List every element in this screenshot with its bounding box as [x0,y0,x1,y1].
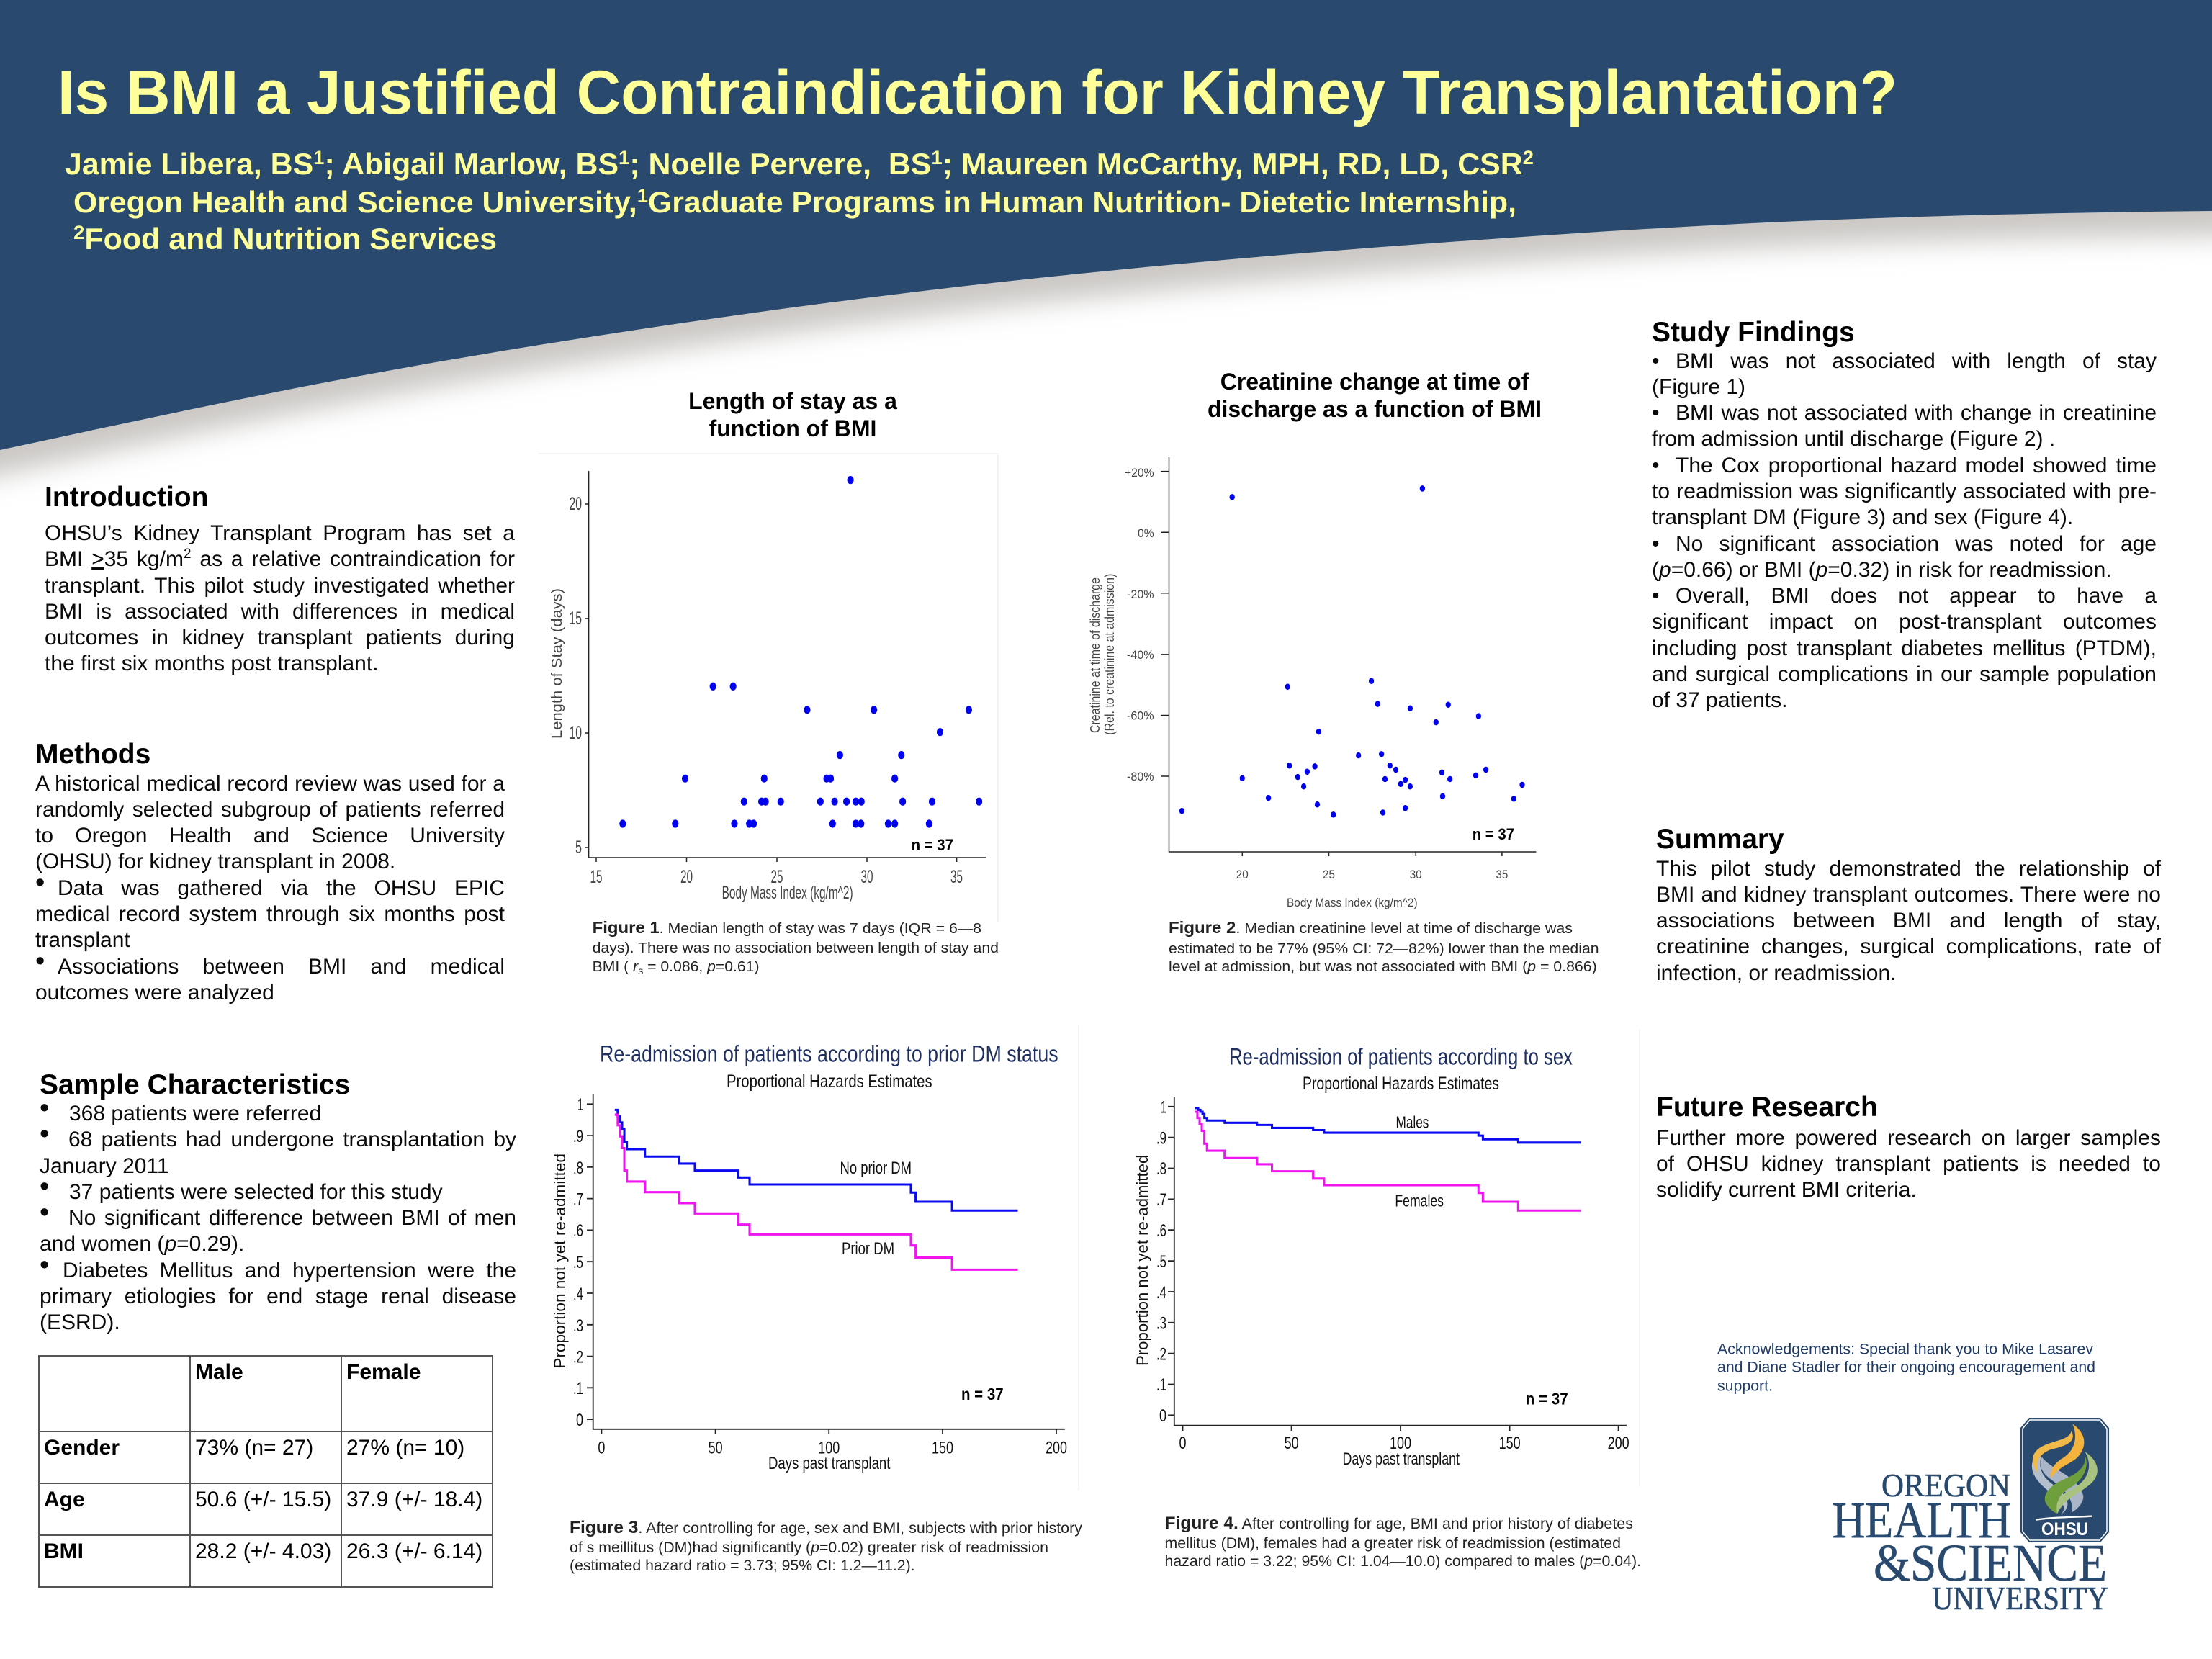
axis labels: figure 1: Length of Stay (days) [549,588,565,739]
axis labels: figure 2: 35 [1496,868,1508,881]
axes: figure 3 [587,1094,1065,1434]
text: introduction body: OHSU’s Kidney Transplant Program has set a [45,521,515,545]
axis labels: figure 1: Body Mass Index (kg/m^2) [722,883,853,903]
axis labels: figure 4 [1133,1097,1629,1469]
authors and affiliations: 2 [73,222,84,243]
caption: figure 1: s [638,965,643,976]
text: methods body: medical record system through six months post [35,902,505,926]
table: sample characteristics by sex: Male [195,1360,243,1384]
authors and affiliations: 1 [619,147,629,168]
text: sample characteristics list: primary etiologies for end stage renal disease [40,1285,516,1308]
text: methods body: outcomes were analyzed [35,981,274,1004]
text: methods body: • [35,946,45,976]
text: sample characteristics list: • [40,1093,49,1123]
table: sample characteristics by sex: BMI [44,1539,84,1563]
heading: summary: Summary [1656,824,1784,854]
curve labels: figure 3: Prior DM [842,1239,894,1259]
logo wordmark: UNIVERSITY [1932,1580,2108,1617]
survival curves: figure 3 [615,1110,1017,1269]
authors and affiliations: 1 [637,185,648,207]
caption: figure 4: Figure 4. After controlling for age, BMI and prior history of diabetes [1165,1514,1633,1533]
text: methods body: Associations between BMI and medical [58,955,505,979]
text: study findings list: (p=0.66) or BMI (p=0.32) in risk for readmission. [1652,558,2112,582]
text: study findings list: No significant association was noted for age [1676,532,2157,556]
curve labels: figure 4 [1395,1112,1444,1210]
authors and affiliations: Oregon Health and Science University, [73,185,627,219]
axis labels: figure 2: Body Mass Index (kg/m^2) [1287,896,1418,909]
panel: summary [1656,824,2161,985]
table: sample characteristics by sex: Gender [44,1436,120,1460]
axis labels: figure 1: 35 [950,867,963,887]
data points: figure 2 [1182,488,1522,814]
text: sample characteristics list: 368 patients were referred [69,1102,321,1125]
icon: OHSU badge: OHSU [2041,1519,2088,1539]
heading: figure 1 title: function of BMI [709,415,876,441]
axis labels: figure 2: -20% [1127,588,1154,601]
panel: introduction [45,482,515,675]
text: future research body: Further more powered research on larger samples [1656,1126,2161,1149]
sample size: figure 4: n = 37 [1526,1390,1568,1408]
sample size: figure 2: n = 37 [1473,825,1514,843]
axis labels: figure 3: 0 [598,1439,605,1457]
caption: figure 2: level at admission, but was not associated with BMI ( p = 0.866) [1169,958,1597,975]
axis labels: figure 1: 25 [770,867,783,887]
table: sample characteristics by sex: Female [346,1360,421,1384]
heading: introduction: Introduction [45,482,208,513]
acknowledgements: support. [1717,1378,1773,1394]
text: study findings list: • [1652,454,1660,477]
text: study findings list: transplant DM (Figure 3) and sex (Figure 4). [1652,505,2073,529]
table: sample characteristics by sex: 27% (n= 10) [346,1436,464,1460]
logo: OHSU [1832,1418,2109,1617]
text: introduction body: the first six months post transplant. [45,652,379,675]
text: methods body [35,772,505,1004]
text: study findings list: significant impact on post-transplant outcomes [1652,610,2157,634]
text: introduction body [45,521,515,675]
authors and affiliations: 1 [313,147,325,168]
axis labels: figure 1: 10 [569,723,582,743]
text: study findings list: from admission until discharge (Figure 2) . [1652,427,2055,451]
sample size: figure 3: n = 37 [961,1385,1004,1403]
axis labels: figure 4: .9 [1156,1129,1166,1148]
icon: OHSU badge [2020,1418,2109,1542]
text: study findings list: • [1652,401,1660,425]
text: future research body: solidify current BMI criteria. [1656,1178,1917,1202]
caption: figure 1: days). There was no association between length of stay and [593,940,999,956]
heading: figure 2 title [1208,369,1542,422]
title: Is BMI a Justified Contraindication for Kidney Transplantation? [58,58,1897,127]
axis labels: figure 4: .7 [1156,1190,1166,1210]
header banner with curved edge [0,0,2212,489]
axis labels: figure 1: 15 [590,867,602,887]
text: future research body: of OHSU kidney transplant patients is needed to [1656,1152,2161,1176]
text: study findings list: The Cox proportional hazard model showed time [1676,454,2157,477]
text: sample characteristics list: 68 patients had undergone transplantation by [68,1128,516,1151]
heading: figure 4 title: Re-admission of patients according to sex [1229,1044,1573,1070]
caption: figure 4: hazard ratio = 3.22; 95% CI: 1.04—10.0) compared to males ( p=0.04). [1165,1553,1641,1570]
text: sample characteristics list: • [40,1119,49,1149]
text: sample characteristics list: No significant difference between BMI of men [68,1206,516,1230]
text: sample characteristics list [40,1093,516,1334]
caption: figure 4 [1165,1514,1641,1570]
text: sample characteristics list: 37 patients were selected for this study [69,1180,443,1204]
text: methods body: to Oregon Health and Science University [35,824,505,848]
axis labels: figure 4: Days past transplant [1342,1449,1460,1469]
axis labels: figure 2: +20% [1125,466,1154,480]
figure 3: re-admission by prior DM status [551,1025,1083,1574]
axis labels: figure 3 [551,1095,1067,1473]
axis labels: figure 4: Proportion not yet re-admitted [1133,1155,1151,1366]
logo wordmark: &SCIENCE [1874,1534,2107,1592]
heading: figure 2 title: discharge as a function of BMI [1208,396,1542,422]
axis labels: figure 4: 200 [1608,1434,1629,1453]
text: summary body: infection, or readmission. [1656,961,1897,985]
panel: future research [1656,1092,2161,1202]
axis labels: figure 2: -60% [1127,709,1154,723]
table: sample characteristics by sex: 73% (n= 27) [195,1436,313,1460]
caption: figure 2: Figure 2. Median creatinine level at time of discharge was [1169,918,1573,937]
table: sample characteristics by sex [38,1355,493,1588]
subtitle: figure 4: Proportional Hazards Estimates [1303,1074,1499,1094]
text: study findings list: Overall, BMI does not appear to have a [1676,584,2157,608]
panel: sample characteristics [40,1069,516,1334]
survival curves: figure 4 [1195,1108,1581,1210]
text: study findings list: • [1652,584,1660,608]
text: study findings list: BMI was not associated with length of stay [1676,349,2157,373]
axis labels: figure 3: .7 [573,1190,583,1210]
panel: methods [35,739,505,1004]
text: summary body: BMI and kidney transplant outcomes. There were no [1656,883,2161,907]
axis labels: figure 4: .2 [1156,1345,1166,1364]
caption: figure 3: of s meillitus (DM)had significantly (p=0.02) greater risk of readmission [570,1539,1048,1556]
axis labels: figure 3: .4 [573,1285,583,1304]
authors and affiliations: Jamie Libera, BS [65,147,308,181]
axes: figure 1 [585,471,986,862]
caption: figure 4: mellitus (DM), females had a greater risk of readmission (estimated [1165,1535,1621,1552]
logo wordmark: HEALTH [1832,1491,2011,1549]
text: study findings list: of 37 patients. [1652,688,1787,712]
subtitle: figure 3: Proportional Hazards Estimates [727,1071,932,1092]
figure 2: creatinine change scatter [1088,369,1599,975]
axis labels: figure 4: .3 [1156,1313,1166,1334]
caption: figure 1: = 0.086, [643,958,707,975]
axis labels: figure 3: 200 [1046,1439,1067,1457]
text: sample characteristics list: (ESRD). [40,1310,120,1334]
sample size: figure 1: n = 37 [912,836,953,854]
authors and affiliations: Graduate Programs in Human Nutrition- Dietetic Internship, [648,185,1516,219]
text: sample characteristics list: and women (p=0.29). [40,1232,244,1256]
text: sample characteristics list: • [40,1172,49,1202]
caption: figure 3 [570,1518,1083,1574]
text: study findings list: • [1652,532,1660,556]
axis labels: figure 4: .4 [1156,1283,1166,1303]
axis labels: figure 3: 0 [576,1411,583,1430]
axis labels: figure 4: 150 [1499,1434,1521,1453]
text: introduction body: transplant. This pilot study investigated whether [45,574,515,598]
table: sample characteristics by sex: 50.6 (+/- 15.5) [195,1488,331,1511]
acknowledgements [1717,1341,2095,1394]
text: introduction body: outcomes in kidney transplant patients during [45,626,515,649]
axis labels: figure 1: 30 [861,867,873,887]
authors and affiliations: 1 [931,147,943,168]
axis labels: figure 3: 100 [818,1439,840,1457]
axis labels: figure 1 [549,494,963,903]
axis labels: figure 2: Creatinine at time of discharge [1088,577,1102,733]
text: methods body: Data was gathered via the OHSU EPIC [58,876,505,900]
axes: figure 4 [1168,1097,1627,1431]
text: methods body: (OHSU) for kidney transplant in 2008. [35,850,395,873]
text: introduction body: BMI is associated with differences in medical [45,600,515,624]
axis labels: figure 1: 20 [569,494,582,514]
text: sample characteristics list: January 2011 [40,1154,169,1178]
heading: methods: Methods [35,739,150,769]
axis labels: figure 2 [1088,466,1508,909]
text: future research body [1656,1126,2161,1202]
axis labels: figure 2: -40% [1127,648,1154,662]
logo wordmark: OREGON [1881,1467,2010,1503]
text: summary body [1656,857,2161,985]
axis labels: figure 3: Proportion not yet re-admitted [551,1154,569,1369]
acknowledgements: Acknowledgements: Special thank you to Mike Lasarev [1717,1341,2094,1358]
caption: figure 1: p=0.61) [707,958,758,975]
axis labels: figure 2: 0% [1138,526,1154,540]
text: study findings list: • [1652,349,1660,373]
axis labels: figure 1: 5 [575,837,582,858]
axis labels: figure 2: 25 [1323,868,1335,881]
axis labels: figure 3: .2 [573,1348,583,1367]
title and authors [58,58,1897,256]
authors and affiliations: ; Noelle Pervere, BS [629,147,931,181]
axis labels: figure 3: Days past transplant [768,1454,891,1473]
text: methods body: transplant [35,928,130,952]
axis labels: figure 3: .1 [573,1379,583,1398]
heading: figure 3 title: Re-admission of patients according to prior DM status [600,1041,1058,1067]
text: introduction body: BMI >35 kg/m2 as a relative contraindication for [45,547,515,571]
acknowledgements: and Diane Stadler for their ongoing encouragement and [1717,1359,2095,1375]
axis labels: figure 4: .6 [1156,1221,1166,1241]
heading: figure 2 title: Creatinine change at time of [1220,369,1529,395]
logo wordmark [1832,1467,2108,1617]
table: sample characteristics by sex: 26.3 (+/- 6.14) [346,1539,482,1563]
heading: study findings: Study Findings [1652,317,1855,347]
axis labels: figure 3: 1 [577,1095,583,1115]
axis labels: figure 1: 20 [680,867,693,887]
axis labels: figure 3: .8 [573,1159,583,1178]
text: methods body: • [35,868,45,898]
axis labels: figure 2: 20 [1236,868,1249,881]
text: summary body: This pilot study demonstrated the relationship of [1656,857,2161,880]
axis labels: figure 4: 0 [1159,1406,1166,1426]
authors and affiliations: 2 [1523,147,1534,168]
caption: figure 1: Figure 1. Median length of stay was 7 days (IQR = 6—8 [593,918,981,937]
axis labels: figure 2: (Rel. to creatinine at admission) [1102,574,1117,735]
figure 4: re-admission by sex [1133,1030,1641,1570]
axis labels: figure 3: .9 [573,1127,583,1146]
axis labels: figure 3: .3 [573,1316,583,1336]
caption: figure 2 [1169,918,1599,975]
axis labels: figure 4: .5 [1156,1252,1166,1272]
caption: figure 2: estimated to be 77% (95% CI: 72—82%) lower than the median [1169,940,1599,957]
authors and affiliations: Food and Nutrition Services [84,222,497,256]
curve labels: figure 3 [840,1159,912,1259]
axis labels: figure 4: 50 [1285,1434,1299,1453]
curve labels: figure 3: No prior DM [840,1159,912,1178]
text: sample characteristics list: • [40,1197,49,1228]
caption: figure 1 [593,918,999,976]
heading: future research: Future Research [1656,1092,1878,1122]
heading: sample characteristics: Sample Characteristics [40,1069,350,1100]
table: sample characteristics by sex: Age [44,1488,85,1511]
curve labels: figure 4: Females [1395,1192,1444,1210]
axis labels: figure 3: .6 [573,1221,583,1241]
text: summary body: creatinine changes, surgical complications, rate of [1656,935,2161,958]
panel: study findings [1652,317,2157,712]
axis labels: figure 3: 150 [932,1439,953,1457]
heading: figure 1 title [688,388,897,441]
axis labels: figure 1: 15 [569,608,582,629]
caption: figure 1: BMI ( r [593,958,638,975]
caption: figure 3: Figure 3. After controlling for age, sex and BMI, subjects with prior history [570,1518,1083,1537]
curve labels: figure 4: Males [1395,1112,1429,1131]
text: study findings list: including post transplant diabetes mellitus (PTDM), [1652,637,2157,660]
heading: figure 1 title: Length of stay as a [688,388,897,414]
axis labels: figure 4: 100 [1390,1434,1411,1453]
authors and affiliations: ; Maureen McCarthy, MPH, RD, LD, CSR [943,147,1523,181]
authors and affiliations: ; Abigail Marlow, BS [325,147,619,181]
axis labels: figure 4: .8 [1156,1159,1166,1179]
axes: figure 2 [1161,457,1536,856]
text: study findings list [1652,349,2157,712]
axis labels: figure 4: .1 [1156,1375,1166,1395]
text: summary body: associations between BMI and length of stay, [1656,909,2161,932]
axis labels: figure 4: 1 [1161,1097,1166,1118]
text: study findings list: and surgical complications in our sample population [1652,662,2157,686]
caption: figure 3: (estimated hazard ratio = 3.73; 95% CI: 1.2—11.2). [570,1557,915,1574]
text: study findings list: to readmission was significantly associated with pre- [1652,480,2157,503]
axis labels: figure 3: 50 [709,1439,723,1457]
data points: figure 1 [623,480,979,824]
text: methods body: randomly selected subgroup of patients referred [35,798,505,822]
axis labels: figure 2: 30 [1410,868,1422,881]
text: sample characteristics list: Diabetes Mellitus and hypertension were the [63,1259,516,1282]
table: sample characteristics by sex: 28.2 (+/- 4.03) [195,1539,331,1563]
figure 1: length of stay scatter [538,388,999,976]
axis labels: figure 2: -80% [1127,770,1154,783]
text: study findings list: (Figure 1) [1652,375,1745,399]
axis labels: figure 4: 0 [1179,1434,1187,1453]
text: methods body: A historical medical record review was used for a [35,772,505,795]
authors and affiliations [65,147,1534,256]
axis labels: figure 3: .5 [573,1253,583,1272]
text: study findings list: BMI was not associated with change in creatinine [1676,401,2157,425]
table: sample characteristics by sex: 37.9 (+/- 18.4) [346,1488,482,1511]
text: sample characteristics list: • [40,1250,49,1280]
